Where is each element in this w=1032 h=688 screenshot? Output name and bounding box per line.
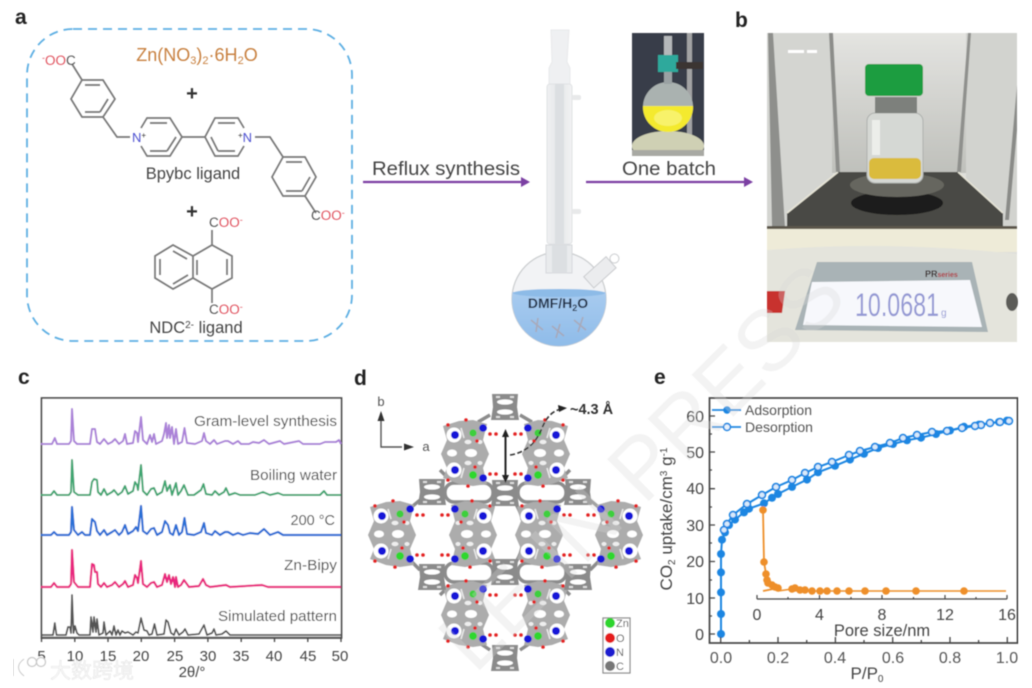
inset baseline series [778, 588, 1006, 591]
y axis title: CO [657, 565, 676, 590]
panel e: CO2 isotherm chart [657, 398, 1018, 685]
stir crystals [531, 317, 586, 338]
x axis title: 2θ/° [179, 664, 205, 681]
y axis tick labels: 40 [686, 481, 704, 498]
x axis tick labels: 0.6 [882, 650, 904, 667]
panel a: reagents [27, 29, 352, 341]
x axis tick labels: 30 [200, 648, 216, 665]
y axis title: 3 [659, 470, 670, 476]
panel label e: e [654, 366, 666, 389]
metal clusters [368, 418, 643, 649]
y axis tick labels: 30 [686, 518, 704, 535]
inset tick labels: 16 [998, 607, 1016, 624]
x axis title: P/P [851, 664, 878, 683]
y axis tick labels: 60 [686, 409, 704, 426]
y axis title: uptake/cm [657, 476, 676, 559]
chart frame [710, 398, 1018, 643]
side neck [584, 250, 623, 288]
x axis tick labels: 15 [100, 648, 116, 665]
label: boiling water: Boiling water [250, 468, 337, 484]
inset axis [757, 595, 1007, 599]
axis arrows [377, 394, 430, 454]
inset pore size plot [753, 510, 1016, 640]
label a axis: a [422, 439, 430, 454]
y axis tick labels: 10 [686, 591, 704, 608]
inset tick labels [753, 607, 1016, 624]
photo: bottle on balance [767, 33, 1018, 342]
zinc nitrate formula: O [244, 45, 258, 65]
label: gram-level synthesis: Gram-level synthesis [194, 414, 337, 430]
Bpybc ligand structure [71, 64, 316, 213]
x axis tick labels: 5 [37, 648, 46, 665]
balance reading: 10.0681 [855, 287, 939, 323]
carboxylate right: COO [311, 208, 342, 223]
element legend: N [616, 647, 624, 659]
carboxylate right: - [342, 208, 345, 218]
round bottom flask [512, 252, 606, 346]
legend [712, 402, 813, 435]
x axis title: 0 [878, 674, 884, 685]
adsorption series [721, 421, 1007, 634]
inset tick labels: 4 [815, 607, 824, 624]
dashed reagent box [27, 29, 352, 341]
x axis tick labels: 0.8 [939, 650, 961, 667]
x axis tick labels: 35 [233, 648, 249, 665]
balance display [795, 262, 988, 332]
trace: Zn-Bipy [41, 550, 341, 587]
inset tick labels: 8 [878, 607, 887, 624]
zinc nitrate formula: 2 [202, 55, 209, 67]
x axis tick labels: 0.4 [824, 650, 846, 667]
watermark: in press: LE IN PRESS [420, 246, 863, 688]
panel label b: b [735, 9, 748, 32]
inset tick labels: 12 [936, 607, 954, 624]
pore size label: ~4.3 Å [570, 401, 614, 418]
desorption series [724, 421, 1009, 530]
trace: simulated pattern [41, 595, 341, 637]
chart frame [42, 398, 342, 638]
balance logo [767, 291, 785, 313]
y axis tick labels [686, 409, 704, 644]
DMF label: DMF/H [528, 295, 572, 311]
panel label a: a [15, 6, 27, 29]
carboxylate left: C [66, 53, 76, 68]
legend: Adsorption [745, 402, 812, 418]
y axis tick labels: 20 [686, 554, 704, 571]
x axis tick labels: 25 [167, 648, 183, 665]
y axis ticks [709, 416, 715, 634]
panel c: XRD chart [37, 398, 348, 681]
pyridinium nitrogen right: + [238, 131, 243, 140]
label: simulated pattern: Simulated pattern [218, 609, 337, 625]
x axis tick labels: 0.2 [767, 650, 789, 667]
pore dimension arrow [502, 405, 567, 483]
pyridinium nitrogen left: + [141, 131, 146, 140]
label b axis: b [377, 394, 385, 409]
linker nodes [418, 394, 592, 671]
reflux label: Reflux synthesis [372, 158, 520, 180]
glass bottle [865, 64, 923, 183]
NDC top carboxylate: COO [209, 215, 240, 230]
x axis tick labels: 45 [300, 648, 316, 665]
x axis tick labels: 1.0 [996, 650, 1018, 667]
zinc nitrate formula: ) [196, 45, 202, 65]
zinc nitrate formula: Zn(NO [136, 45, 190, 65]
arrow: reflux synthesis [363, 158, 530, 187]
y axis tick labels: 0 [695, 627, 704, 644]
DMF label: O [577, 295, 588, 311]
trace: boiling water [41, 460, 341, 495]
balance unit: g [941, 308, 947, 319]
x axis tick labels: 10 [67, 648, 83, 665]
legend: Desorption [745, 419, 813, 435]
x axis tick labels: 40 [266, 648, 282, 665]
NDC top carboxylate: - [240, 215, 243, 225]
panel label d: d [354, 367, 367, 390]
panel label c: c [18, 366, 30, 389]
y axis title: g [657, 456, 676, 471]
one batch label: One batch [622, 158, 716, 180]
arrow: one batch [586, 158, 753, 187]
watermark brand text: 大数跨境 [50, 660, 134, 683]
pyridinium nitrogen left: N [132, 130, 141, 145]
solvent [512, 288, 606, 346]
inset x axis title: Pore size/nm [834, 622, 930, 640]
panel d: crystal framework [368, 394, 643, 673]
element legend [603, 618, 630, 673]
label: Zn-Bipy: Zn-Bipy [284, 558, 338, 574]
label: 200 C: 200 °C [290, 513, 335, 529]
watermark: source logo [13, 658, 134, 683]
NDC bottom carboxylate: - [240, 302, 243, 312]
inset tick labels: 0 [753, 607, 762, 624]
plus sign one: + [186, 83, 198, 105]
x axis ticks [42, 638, 341, 642]
NDC ligand structure [155, 230, 232, 303]
zinc nitrate formula: 3 [190, 55, 196, 67]
pyridinium nitrogen right: N [243, 130, 252, 145]
NDC bottom carboxylate: COO [209, 302, 240, 317]
trace: gram-level synthesis [41, 409, 341, 444]
photo: yellow suspension flask [632, 33, 704, 161]
zinc nitrate formula: 2 [238, 55, 244, 67]
plus sign two: + [186, 201, 198, 223]
Bpybc ligand label: Bpybc ligand [146, 165, 240, 183]
y axis title: -1 [659, 447, 670, 456]
x axis tick labels [37, 648, 348, 665]
x axis tick labels: 20 [133, 648, 149, 665]
icon: reflux apparatus [510, 30, 623, 352]
x axis tick labels: 0.0 [710, 650, 732, 667]
carboxylate left: - [42, 53, 45, 63]
framework links [408, 415, 602, 650]
inset pore curve [763, 510, 778, 591]
NDC ligand label: NDC [149, 319, 185, 337]
trace: 200 C [41, 506, 341, 535]
element legend: O [616, 633, 625, 645]
carboxylate left: OO [45, 53, 66, 68]
element legend: C [616, 661, 624, 673]
element legend: Zn [616, 618, 629, 630]
x axis tick labels [710, 650, 1018, 667]
NDC ligand label: ligand [194, 319, 243, 337]
zinc nitrate formula: ·6H [209, 45, 238, 65]
balance series label: PRseries [925, 269, 958, 279]
x axis ticks [721, 637, 1007, 643]
x axis tick labels: 50 [332, 648, 348, 665]
NDC ligand label: 2- [185, 320, 194, 331]
DMF label: 2 [572, 303, 577, 313]
y axis title: 2 [667, 559, 678, 565]
condenser [549, 30, 570, 84]
y axis tick labels: 50 [686, 445, 704, 462]
